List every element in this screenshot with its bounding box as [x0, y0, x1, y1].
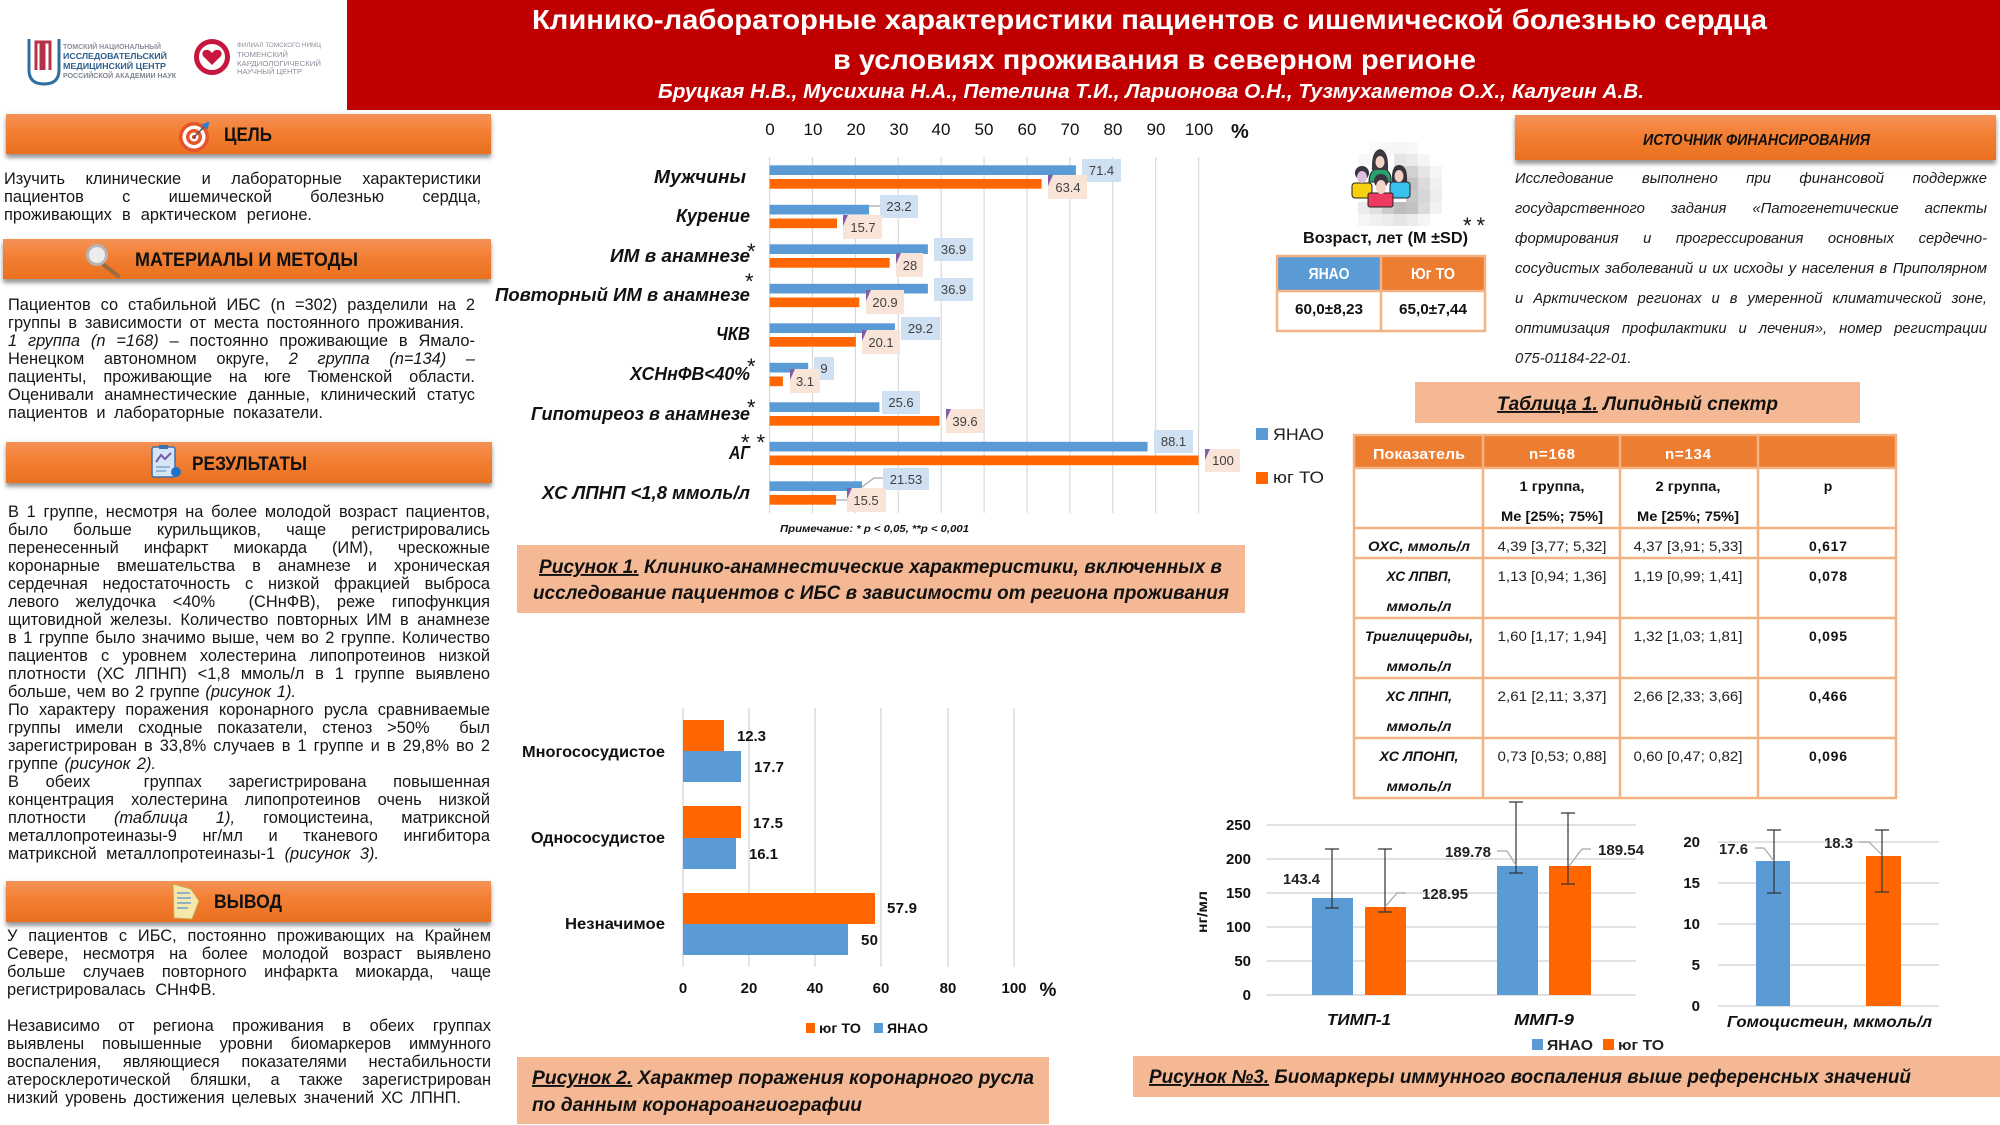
- materials and methods text: Пациентов со стабильной ИБС (n =302) разделили на 2: [8, 296, 475, 314]
- x axis labels: [679, 980, 1057, 1001]
- caption: table 1: Таблица 1. Липидный спектр: [1497, 394, 1778, 415]
- row: triglycerides: Триглицериды,: [1365, 628, 1473, 644]
- goal text: Изучить клинические и лабораторные характеристики: [4, 170, 481, 188]
- results text: металлопротеиназы-9 нг/мл и тканевого ингибитора: [8, 827, 490, 845]
- value labels: 17.7: [754, 759, 784, 776]
- conclusion text: У пациентов с ИБС, постоянно проживающих на Крайнем: [7, 927, 491, 945]
- icon: magnifier: [88, 246, 118, 276]
- row: triglycerides: ммоль/л: [1386, 658, 1452, 674]
- funding text: [1515, 171, 1987, 367]
- table grid: [1354, 435, 1896, 798]
- data labels: ЯНАО: 23.2: [886, 199, 912, 214]
- row: ХС ЛПОНП: ммоль/л: [1386, 778, 1452, 794]
- grid lines: [683, 708, 1014, 967]
- bars: [1312, 866, 1591, 995]
- subheader row: p: [1824, 478, 1832, 494]
- results text: [8, 503, 490, 863]
- leader lines: [836, 206, 883, 500]
- x axis labels: 20: [741, 980, 757, 997]
- materials and methods text: пациентов и лабораторные показатели.: [8, 404, 323, 422]
- y axis labels: 250: [1226, 817, 1251, 834]
- data labels: ЯНАО: 9: [820, 361, 828, 376]
- goal text: проживающих в арктическом регионе.: [4, 206, 312, 224]
- row: ОХС: ОХС, ммоль/л: [1368, 538, 1470, 554]
- value labels: 17.5: [753, 815, 783, 832]
- subheader row: [1501, 478, 1832, 524]
- row: ХС ЛПНП: ммоль/л: [1386, 718, 1452, 734]
- value labels: 50: [861, 932, 878, 949]
- subheader row: Me [25%; 75%]: [1637, 508, 1739, 524]
- bars: юг ТО: [683, 720, 875, 924]
- logos: [28, 39, 321, 86]
- value labels: 16.1: [749, 846, 778, 863]
- x axis labels: 60: [873, 980, 889, 997]
- caption: figure 2: Рисунок 2. Характер поражения коронарного русла: [532, 1068, 1034, 1089]
- authors: Бруцкая Н.В., Мусихина Н.А., Петелина Т.И., Ларионова О.Н., Тузмухаметов О.Х., Калугин А.В.: [658, 81, 1644, 103]
- legend: юг ТО: [1273, 468, 1324, 487]
- x axis labels: 40: [807, 980, 823, 997]
- icon: note: [173, 884, 199, 919]
- results text: пациентов с уровнем холестерина липопротеинов низкой: [8, 647, 490, 665]
- results text: В обеих группах зарегистрирована повышенная: [8, 773, 490, 791]
- header band with title: [347, 0, 2000, 110]
- error bars: [1767, 830, 1889, 893]
- row: ХС ЛПНП: [1385, 688, 1847, 734]
- grid lines: [1266, 825, 1636, 995]
- funding text: 075-01184-22-01.: [1515, 351, 1632, 367]
- row: ХС ЛПОНП: 0,60 [0,47; 0,82]: [1634, 748, 1742, 764]
- subheader row: 2 группа,: [1656, 478, 1720, 494]
- data labels: ЯНАО: 36.9: [941, 242, 966, 257]
- conclusion text: воспаления, являющиеся показателями нестабильности: [7, 1053, 491, 1071]
- category labels: Курение: [676, 206, 750, 226]
- conclusion text: атеросклеротической бляшки, а также зарегистрирован: [7, 1071, 491, 1089]
- bars: ЯНАО: [683, 751, 848, 955]
- materials and methods text: Оценивали анамнестические данные, клинический статус: [8, 386, 475, 404]
- x axis labels: 100: [1185, 120, 1213, 139]
- value labels: [737, 728, 917, 949]
- conclusion text: выявлены повышенные уровни биомаркеров иммунного: [7, 1035, 491, 1053]
- y axis labels: 10: [1683, 916, 1700, 933]
- row: ХС ЛПОНП: 0,73 [0,53; 0,88]: [1498, 748, 1606, 764]
- title line 2: в условиях проживания в северном регионе: [833, 44, 1476, 75]
- conclusion text: Севере, несмотря на более молодой возраст выявлено: [7, 945, 491, 963]
- figure 3 legend: [1532, 1037, 1664, 1054]
- conclusion text: больше случаев повторного инфаркта миокарда, чаще: [7, 963, 491, 981]
- conclusion text: [7, 927, 491, 1107]
- logo: research centre: РОССИЙСКОЙ АКАДЕМИИ НАУК: [63, 71, 177, 80]
- results text: в 1 группе было значимо выше, чем во 2 группе. Количество: [8, 629, 490, 647]
- x axis labels: 0: [765, 120, 775, 139]
- row: ХС ЛПОНП: ХС ЛПОНП,: [1378, 748, 1458, 764]
- heading text: РЕЗУЛЬТАТЫ: [192, 454, 307, 475]
- results text: больше, чем во 2 группе (рисунок 1).: [8, 683, 296, 701]
- heading bar: results: [6, 442, 492, 483]
- materials and methods text: Ненецком автономном округе, 2 группа (n=134) –: [8, 350, 475, 368]
- legend: ЯНАО: [1273, 425, 1324, 444]
- x axis labels: 10: [804, 120, 822, 139]
- icon: clipboard: [152, 445, 181, 477]
- significance stars: **: [741, 430, 765, 455]
- icon: group of people: [1352, 142, 1442, 226]
- row: ХС ЛПВП: [1386, 568, 1847, 614]
- heading text: ЦЕЛЬ: [224, 125, 272, 146]
- figure 3 legend: ЯНАО: [1547, 1037, 1593, 1054]
- data labels: юг ТО: 28: [903, 258, 917, 273]
- row: ОХС: 4,37 [3,91; 5,33]: [1634, 538, 1742, 554]
- funding text: Исследование выполнено при финансовой поддержке: [1515, 171, 1987, 187]
- funding text: государственного задания «Патогенетические аспекты: [1515, 201, 1987, 217]
- subheader row: Me [25%; 75%]: [1501, 508, 1603, 524]
- category labels: [522, 744, 665, 933]
- age table: 65,0±7,44: [1399, 301, 1468, 318]
- category labels: Гипотиреоз в анамнезе: [531, 404, 750, 424]
- x axis labels: 40: [932, 120, 950, 139]
- row: ОХС: 4,39 [3,77; 5,32]: [1498, 538, 1606, 554]
- results text: зарегистрирован в 33,8% случаев в 1 группе и в 29,8% во 2: [8, 737, 490, 755]
- value labels: 18.3: [1824, 836, 1853, 852]
- caption: figure 3: Рисунок №3. Биомаркеры иммунного воспаления выше референсных значений: [1149, 1067, 1911, 1088]
- results text: матриксной металлопротеиназы-1 (рисунок 3).: [8, 845, 379, 863]
- y axis labels: 5: [1692, 957, 1700, 974]
- subheader row: 1 группа,: [1520, 478, 1584, 494]
- logo: research centre: [29, 39, 177, 84]
- materials and methods text: пациенты, проживающие на юге Тюменской области.: [8, 368, 475, 386]
- results text: концентрация холестерина липопротеинов очень низкой: [8, 791, 490, 809]
- value labels: 17.6: [1719, 842, 1748, 858]
- significance stars: *: [747, 395, 756, 420]
- x axis labels: 60: [1018, 120, 1036, 139]
- data labels: юг ТО: 20.1: [868, 335, 894, 350]
- row: ХС ЛПВП: ммоль/л: [1386, 598, 1452, 614]
- results text: По характеру поражения коронарного русла сравниваемые: [8, 701, 490, 719]
- conclusion text: низкий уровень достижения целевых значений ХС ЛПНП.: [7, 1089, 461, 1107]
- results text: В 1 группе, несмотря на более молодой возраст пациентов,: [8, 503, 490, 521]
- row: ХС ЛПВП: 1,19 [0,99; 1,41]: [1634, 568, 1742, 584]
- heading bar: funding: [1515, 115, 1996, 160]
- category labels: [1327, 1012, 1574, 1029]
- x axis labels: %: [1040, 980, 1057, 1001]
- logo: cardiology centre: НАУЧНЫЙ ЦЕНТР: [237, 67, 302, 76]
- row: triglycerides: 1,60 [1,17; 1,94]: [1498, 628, 1606, 644]
- y axis labels: 50: [1234, 953, 1251, 970]
- materials and methods text: 1 группа (n =168) – постоянно проживающие в Ямало-: [8, 332, 475, 350]
- x axis labels: 90: [1147, 120, 1165, 139]
- results text: группы имели сходные показатели, стеноз >50% был: [8, 719, 490, 737]
- heading bar: funding: ИСТОЧНИК ФИНАНСИРОВАНИЯ: [1643, 132, 1871, 149]
- x axis labels: %: [1231, 121, 1249, 143]
- value labels: [1283, 843, 1644, 903]
- y axis labels: 200: [1226, 851, 1251, 868]
- row: triglycerides: 1,32 [1,03; 1,81]: [1634, 628, 1742, 644]
- value labels: 189.78: [1445, 845, 1491, 861]
- category labels: ХС ЛПНП <1,8 ммоль/л: [541, 483, 750, 503]
- heading text: ВЫВОД: [214, 892, 282, 913]
- row: ХС ЛПОНП: 0,096: [1809, 748, 1847, 764]
- results text: щитовидной железы. Количество повторных ИМ в анамнезе: [8, 611, 490, 629]
- heading text: МАТЕРИАЛЫ И МЕТОДЫ: [135, 250, 358, 271]
- x axis labels: 80: [1104, 120, 1122, 139]
- data labels: юг ТО: [790, 175, 1240, 512]
- category labels: ЧКВ: [716, 324, 750, 344]
- value labels: 57.9: [887, 900, 917, 917]
- data labels: юг ТО: 15.5: [853, 493, 879, 508]
- error bars: [1325, 802, 1575, 912]
- legend: [806, 1020, 928, 1036]
- category labels: ХСНнФВ<40%: [629, 364, 750, 384]
- results text: перенесенный инфаркт миокарда (ИМ), чрескожные: [8, 539, 490, 557]
- category labels: ММП-9: [1514, 1012, 1574, 1029]
- figure 2 bar chart: [522, 708, 1057, 1036]
- significance stars: *: [745, 269, 754, 294]
- row: triglycerides: 0,095: [1809, 628, 1847, 644]
- caption: figure 1: [517, 545, 1245, 613]
- age title: Возраст, лет (M ±SD): [1303, 230, 1468, 247]
- grid lines: [1718, 842, 1939, 1006]
- value labels: 189.54: [1598, 843, 1644, 859]
- note: Примечание: * p < 0,05, **p < 0,001: [780, 523, 969, 535]
- heading bar: goal: [6, 114, 491, 154]
- row: triglycerides: [1365, 628, 1847, 674]
- category labels: Многососудистое: [522, 744, 665, 761]
- age table: 60,0±8,23: [1295, 301, 1363, 318]
- category labels: [495, 167, 751, 503]
- legend: ЯНАО: [887, 1020, 928, 1036]
- heading bar: conclusion: [6, 881, 491, 922]
- bars: [1756, 856, 1901, 1006]
- figure 1 bar chart: [495, 120, 1324, 535]
- x axis labels: 50: [975, 120, 993, 139]
- age table: [1277, 256, 1485, 331]
- data labels: ЯНАО: 88.1: [1161, 434, 1186, 449]
- data labels: юг ТО: 15.7: [850, 220, 876, 235]
- y axis labels: [1226, 817, 1251, 1004]
- row: ОХС: [1368, 538, 1847, 554]
- age table: ЯНАО: [1308, 266, 1350, 283]
- row: ХС ЛПНП: 2,61 [2,11; 3,37]: [1498, 688, 1606, 704]
- category labels: Повторный ИМ в анамнезе: [495, 285, 750, 305]
- y axis labels: 20: [1683, 834, 1700, 851]
- results text: было больше курильщиков, чаще регистрировались: [8, 521, 490, 539]
- caption: figure 2: [517, 1057, 1049, 1124]
- row: ХС ЛПВП: ХС ЛПВП,: [1386, 568, 1452, 584]
- data labels: ЯНАО: 21.53: [890, 472, 922, 487]
- category labels: ТИМП-1: [1327, 1012, 1391, 1029]
- leader lines: [1385, 849, 1591, 907]
- data labels: юг ТО: 100: [1212, 453, 1234, 468]
- heading bar: materials and methods: [3, 239, 491, 279]
- category labels: Мужчины: [654, 167, 747, 187]
- caption: figure 1: Рисунок 1. Клинико-анамнестические характеристики, включенных в: [539, 557, 1222, 578]
- category labels: Однососудистое: [531, 830, 665, 847]
- category labels: ИМ в анамнезе: [610, 246, 750, 266]
- x axis labels: 80: [940, 980, 956, 997]
- y axis labels: 100: [1226, 919, 1251, 936]
- logo: cardiology centre: [196, 42, 321, 76]
- figure 3 chart: TIMP-1 and MMP-9: [1194, 801, 1644, 1029]
- x axis labels: 30: [890, 120, 908, 139]
- materials and methods text: [8, 296, 475, 422]
- data labels: ЯНАО: 71.4: [1089, 163, 1114, 178]
- data labels: юг ТО: 39.6: [952, 414, 978, 429]
- goal text: пациентов с ишемической болезнью сердца,: [4, 188, 481, 206]
- table header fill: [1354, 435, 1896, 468]
- data labels: ЯНАО: [814, 159, 1193, 490]
- x axis labels: 0: [679, 980, 687, 997]
- value labels: 12.3: [737, 728, 766, 745]
- funding text: оптимизация профилактики и лечения», номер регистрации: [1515, 321, 1987, 337]
- logo: cardiology centre: КАРДИОЛОГИЧЕСКИЙ: [237, 59, 321, 68]
- caption: figure 1: исследование пациентов с ИБС в зависимости от региона проживания: [533, 583, 1229, 604]
- category labels: Незначимое: [565, 916, 665, 933]
- x axis labels: 70: [1061, 120, 1079, 139]
- x axis labels: 20: [847, 120, 865, 139]
- age table: Юг ТО: [1411, 266, 1455, 283]
- value labels: 143.4: [1283, 872, 1320, 888]
- data labels: юг ТО: 3.1: [796, 374, 814, 389]
- materials and methods text: группы в зависимости от места постоянного проживания.: [8, 314, 464, 332]
- results text: плотности (ХС ЛПНП) <1,8 ммоль/л в 1 группе выявлено: [8, 665, 490, 683]
- results text: коронарные вмешательства в анамнезе и хроническая: [8, 557, 490, 575]
- y axis labels: 15: [1683, 875, 1700, 892]
- category labels: АГ: [728, 443, 751, 463]
- data labels: юг ТО: 63.4: [1055, 180, 1081, 195]
- y axis labels: 0: [1692, 998, 1700, 1015]
- value labels: 128.95: [1422, 887, 1468, 903]
- icon: target: [179, 122, 209, 152]
- header row: [1373, 446, 1712, 463]
- title line 1: Клинико-лабораторные характеристики пациентов с ишемической болезнью сердца: [532, 4, 1767, 35]
- stars: **: [1463, 213, 1485, 238]
- caption: figure 2: по данным коронароангиографии: [532, 1095, 862, 1116]
- figure 3 legend: юг ТО: [1618, 1037, 1664, 1054]
- row: ХС ЛПВП: 1,13 [0,94; 1,36]: [1498, 568, 1606, 584]
- bars: юг ТО: [770, 179, 1199, 505]
- x axis labels: 100: [1001, 980, 1027, 997]
- significance stars: *: [747, 239, 756, 264]
- header row: Показатель: [1373, 446, 1465, 463]
- header row: n=168: [1529, 446, 1575, 463]
- category label: Гомоцистеин, мкмоль/л: [1727, 1014, 1932, 1031]
- results text: левого желудочка <40% (СНнФВ), реже гипофункция: [8, 593, 490, 611]
- caption: figure 3: [1133, 1056, 2000, 1097]
- data labels: юг ТО: 20.9: [872, 295, 898, 310]
- logo: research centre: ТОМСКИЙ НАЦИОНАЛЬНЫЙ: [63, 42, 161, 51]
- leader lines: [1755, 842, 1882, 861]
- logo: research centre: ИССЛЕДОВАТЕЛЬСКИЙ: [63, 50, 167, 61]
- funding text: формирования и прогрессирования основных сердечно-: [1515, 231, 1987, 247]
- funding text: сосудистых заболеваний и их исходы у населения в Приполярном: [1515, 261, 1987, 277]
- conclusion text: Независимо от региона проживания в обеих группах: [7, 1017, 491, 1035]
- legend: [1256, 425, 1324, 487]
- logo: cardiology centre: ТЮМЕНСКИЙ: [237, 50, 288, 59]
- logo: research centre: МЕДИЦИНСКИЙ ЦЕНТР: [63, 60, 166, 71]
- row: ОХС: 0,617: [1809, 538, 1847, 554]
- funding text: и Арктическом регионах и в умеренной климатической зоне,: [1515, 291, 1987, 307]
- grid lines: [770, 157, 1199, 513]
- row: ХС ЛПВП: 0,078: [1809, 568, 1847, 584]
- results text: сердечная недостаточность с низкой фракцией выброса: [8, 575, 490, 593]
- y axis labels: [1683, 834, 1700, 1015]
- data labels: ЯНАО: 29.2: [908, 321, 933, 336]
- figure 3 chart: homocysteine: [1683, 829, 1939, 1031]
- significance stars: [741, 239, 765, 455]
- logo: cardiology centre: ФИЛИАЛ ТОМСКОГО НИМЦ: [237, 42, 321, 49]
- data labels: ЯНАО: 25.6: [888, 395, 914, 410]
- goal text: [4, 170, 481, 224]
- value labels: [1719, 836, 1853, 858]
- row: ХС ЛПНП: 0,466: [1809, 688, 1847, 704]
- header row: n=134: [1665, 446, 1712, 463]
- bars: ЯНАО: [770, 165, 1148, 491]
- y axis labels: 0: [1243, 987, 1251, 1004]
- results text: плотности (таблица 1), гомоцистеина, матриксной: [8, 809, 490, 827]
- x axis labels: [765, 120, 1249, 143]
- table: lipid spectrum: [1352, 434, 1898, 800]
- data labels: ЯНАО: 36.9: [941, 282, 966, 297]
- y axis title: нг/мл: [1194, 891, 1210, 933]
- row: ХС ЛПНП: ХС ЛПНП,: [1385, 688, 1452, 704]
- caption: table 1: [1415, 382, 1860, 423]
- results text: группе (рисунок 2).: [8, 755, 156, 773]
- conclusion text: регистрировалась СНнФВ.: [7, 981, 216, 999]
- significance stars: *: [747, 354, 756, 379]
- y axis labels: 150: [1226, 885, 1251, 902]
- row: ХС ЛПНП: 2,66 [2,33; 3,66]: [1634, 688, 1742, 704]
- legend: юг ТО: [819, 1020, 861, 1036]
- row: ХС ЛПОНП: [1378, 748, 1847, 794]
- age block: [1276, 213, 1486, 332]
